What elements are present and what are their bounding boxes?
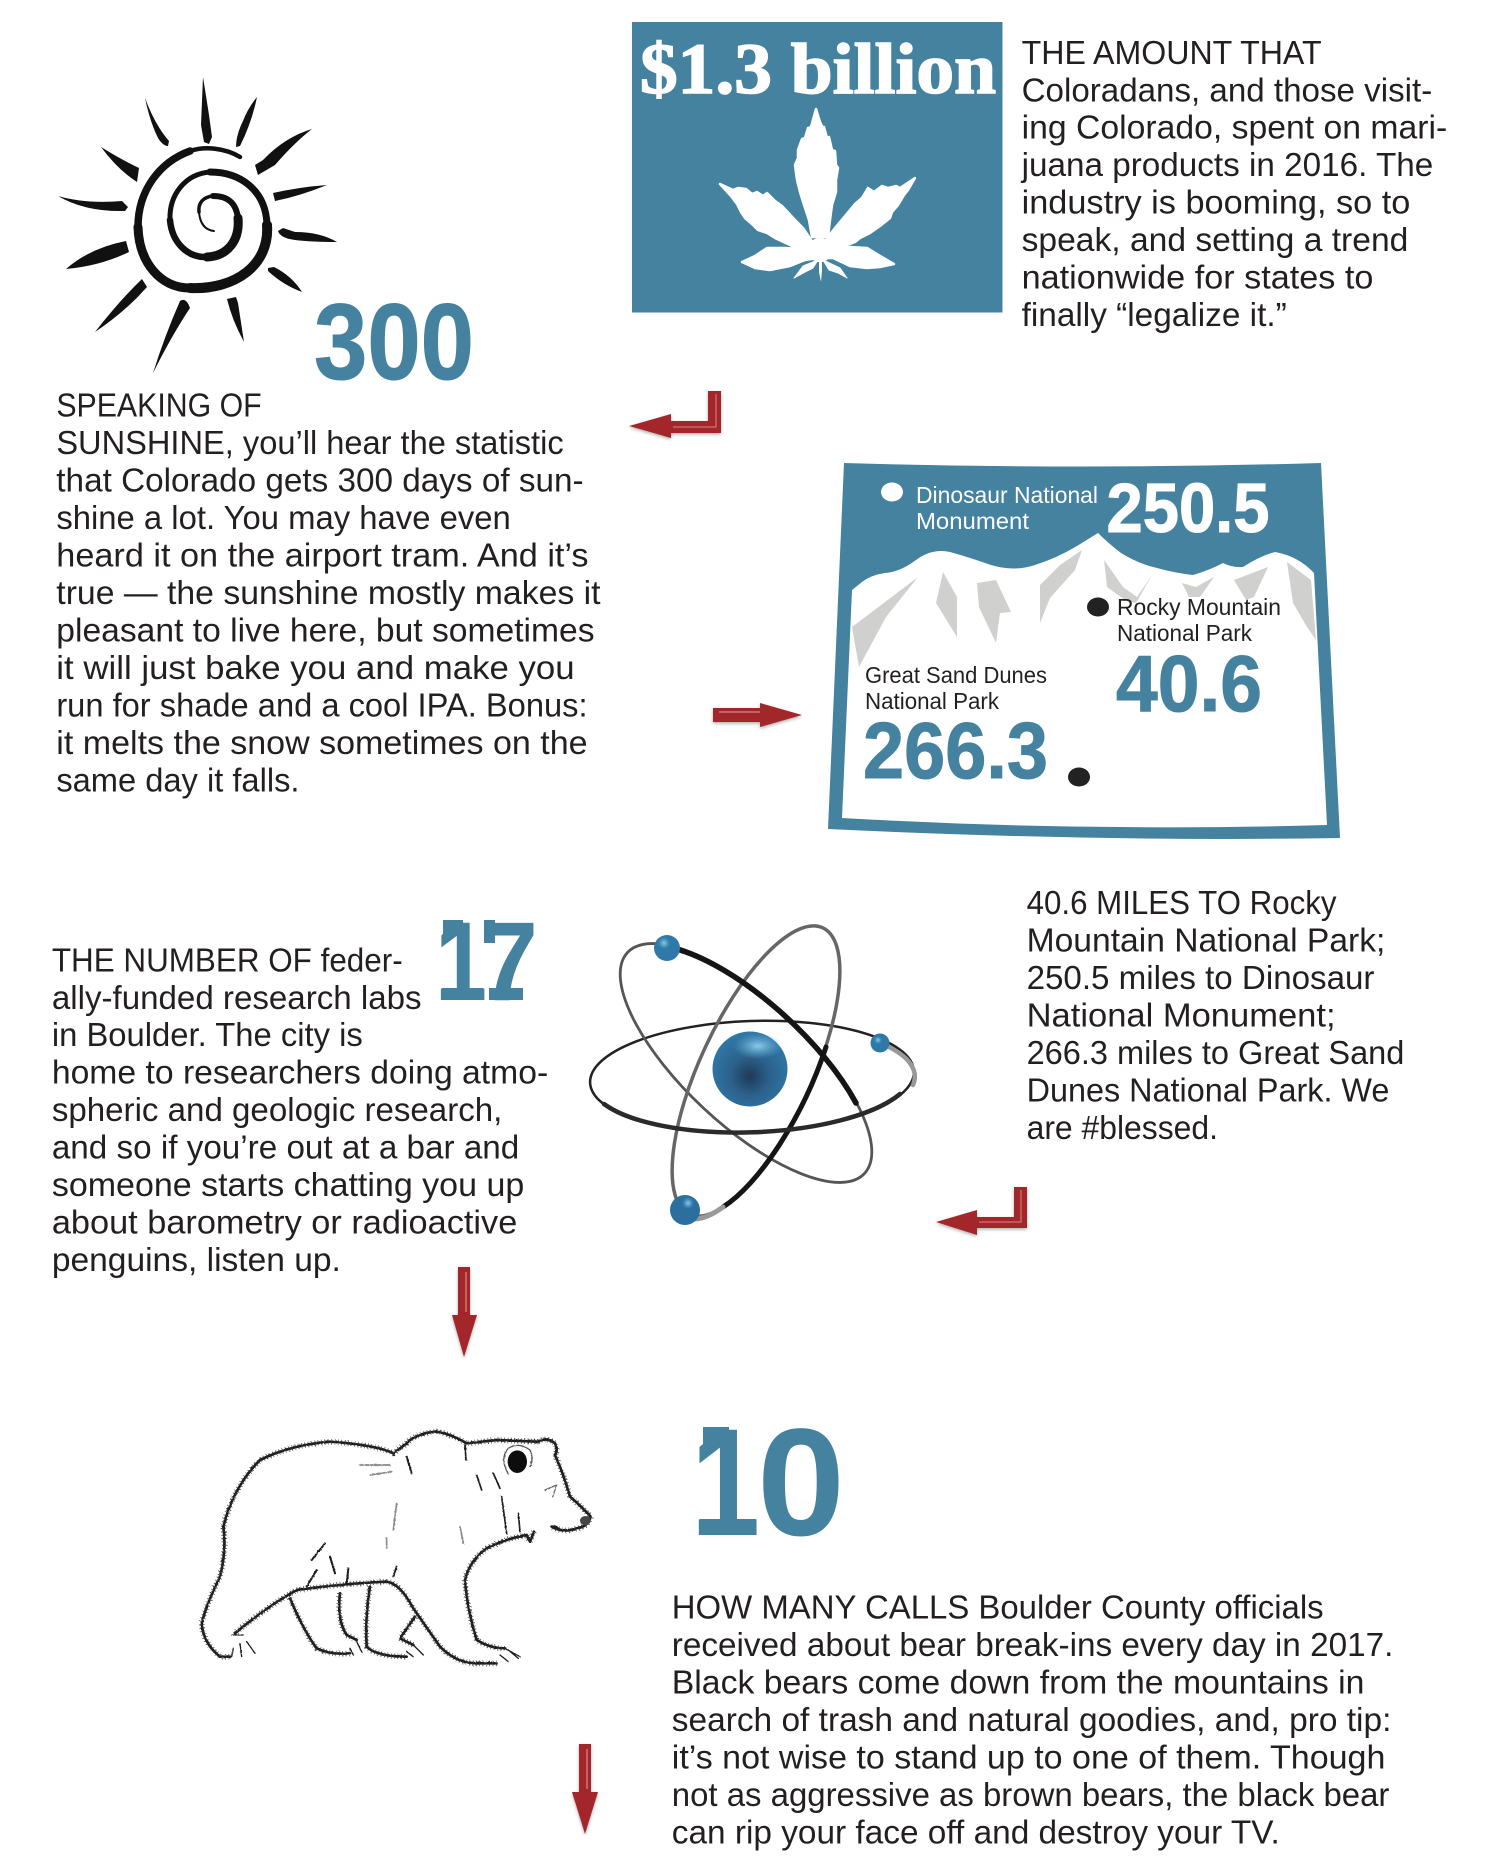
marker: Great Sand Dunes National Park: National Park: [865, 688, 999, 714]
marker: Great Sand Dunes National Park: Great Sand Dunes: [865, 662, 1047, 688]
marker: Rocky Mountain National Park: National Park: [1117, 620, 1252, 646]
text: sunshine: SPEAKING OF: [56, 387, 262, 424]
stat: 17: 1: [435, 899, 487, 1024]
text: miles to parks: Mountain National Park;: [1027, 921, 1385, 958]
panel: marijuana spending: [632, 22, 1447, 333]
text: miles to parks: are #blessed.: [1027, 1109, 1218, 1146]
arrow: return left from spending: [629, 391, 721, 438]
icon: bear: [202, 1432, 591, 1663]
arrow: return left to atom: [936, 1187, 1027, 1235]
icon: sun: [58, 77, 337, 373]
map: snowy mountains: [842, 533, 1327, 827]
text: sunshine: that Colorado gets 300 days of sun-: [56, 461, 584, 498]
text: bear calls: not as aggressive as brown bears, the black bear: [672, 1776, 1389, 1813]
text: sunshine: it will just bake you and make you: [56, 649, 575, 686]
text: bear calls: search of trash and natural goodies, and, pro tip:: [672, 1701, 1391, 1738]
text: sunshine: SUNSHINE, you’ll hear the statistic: [56, 424, 564, 461]
marker: Rocky Mountain National Park: Rocky Mountain: [1117, 594, 1281, 620]
blue box with leaf: [632, 22, 1002, 312]
map: mountain shadows: [852, 550, 1316, 667]
text: sunshine: true — the sunshine mostly makes it: [56, 574, 601, 611]
text: sunshine: pleasant to live here, but sometimes: [56, 611, 595, 648]
text: marijuana spending: Coloradans, and those visit-: [1022, 71, 1432, 108]
arrow: down to next page: [572, 1744, 598, 1834]
text: marijuana spending: juana products in 2016. The: [1021, 146, 1433, 183]
text: miles to parks: National Monument;: [1027, 996, 1336, 1033]
text: marijuana spending: nationwide for states to: [1022, 259, 1373, 296]
marker: Dinosaur National Monument: Dinosaur National: [916, 482, 1098, 508]
arrow: right to map: [713, 703, 802, 727]
panel: Colorado map: [828, 463, 1340, 839]
panel: research labs: [52, 899, 548, 1278]
text: research labs: THE NUMBER OF feder-: [52, 941, 403, 978]
text: marijuana spending: ing Colorado, spent on mari-: [1022, 109, 1447, 146]
marker: Rocky Mountain National Park: [1087, 594, 1281, 728]
text: marijuana spending: industry is booming, so to: [1022, 184, 1410, 221]
stat: 10: [691, 1397, 845, 1568]
text: miles to parks: Dunes National Park. We: [1027, 1071, 1389, 1108]
text: sunshine: same day it falls.: [56, 761, 300, 798]
marker: Rocky Mountain National Park: 40.6: [1116, 639, 1262, 728]
text: miles to parks: 266.3 miles to Great Sand: [1027, 1034, 1404, 1071]
text: research labs: home to researchers doing atmo-: [52, 1054, 548, 1091]
text: sunshine: it melts the snow sometimes on the: [56, 724, 588, 761]
stat: 17: 7: [480, 899, 538, 1024]
text: bear calls: can rip your face off and destroy your TV.: [672, 1814, 1280, 1851]
panel: 300 days of sunshine: [56, 77, 601, 798]
map: state outline: [828, 463, 1340, 839]
text: miles to parks: [1027, 884, 1404, 1146]
text: bear calls: Black bears come down from the mountains in: [672, 1664, 1364, 1701]
stat: 17: [435, 899, 538, 1024]
arrow: down to bear: [452, 1267, 477, 1357]
text: sunshine: shine a lot. You may have even: [56, 499, 511, 536]
text: marijuana spending: [1021, 34, 1447, 333]
text: research labs: penguins, listen up.: [52, 1241, 341, 1278]
text: bear calls: it’s not wise to stand up to one of them. Though: [672, 1739, 1385, 1776]
marker: Great Sand Dunes National Park: [863, 662, 1090, 795]
text: marijuana spending: finally “legalize it.”: [1022, 296, 1287, 333]
text: research labs: spheric and geologic research,: [52, 1091, 502, 1128]
text: bear calls: [672, 1589, 1393, 1851]
marker: Dinosaur National Monument: Monument: [916, 508, 1030, 534]
stat: 10: 1: [691, 1397, 760, 1568]
text: research labs: [52, 941, 548, 1278]
text: research labs: about barometry or radioactive: [52, 1204, 517, 1241]
text: bear calls: received about bear break-ins every day in 2017.: [672, 1626, 1393, 1663]
text: marijuana spending: speak, and setting a trend: [1022, 221, 1408, 258]
text: research labs: someone starts chatting you up: [52, 1166, 524, 1203]
marker: Dinosaur National Monument: [881, 469, 1270, 547]
heading: $1.3 billion: $1.3 billion: [640, 29, 996, 109]
text: research labs: ally-funded research labs: [52, 979, 422, 1016]
text: sunshine: run for shade and a cool IPA. Bonus:: [56, 686, 588, 723]
panel: bear calls: [672, 1397, 1393, 1851]
text: research labs: and so if you’re out at a bar and: [52, 1129, 519, 1166]
text: sunshine: heard it on the airport tram. And it’s: [56, 536, 589, 573]
stat: 10: 0: [757, 1397, 845, 1568]
text: research labs: in Boulder. The city is: [52, 1016, 363, 1053]
marker: Great Sand Dunes National Park: 266.3: [863, 706, 1048, 795]
text: marijuana spending: THE AMOUNT THAT: [1022, 34, 1322, 71]
stat: 300: 300: [314, 281, 474, 402]
icon: cannabis leaf: [720, 109, 915, 282]
text: miles to parks: 250.5 miles to Dinosaur: [1027, 959, 1374, 996]
icon: atom: [585, 904, 916, 1238]
text: miles to parks: 40.6 MILES TO Rocky: [1027, 884, 1337, 921]
text: sunshine: [56, 387, 601, 798]
marker: Dinosaur National Monument: 250.5: [1106, 469, 1270, 547]
text: bear calls: HOW MANY CALLS Boulder County officials: [672, 1589, 1324, 1626]
